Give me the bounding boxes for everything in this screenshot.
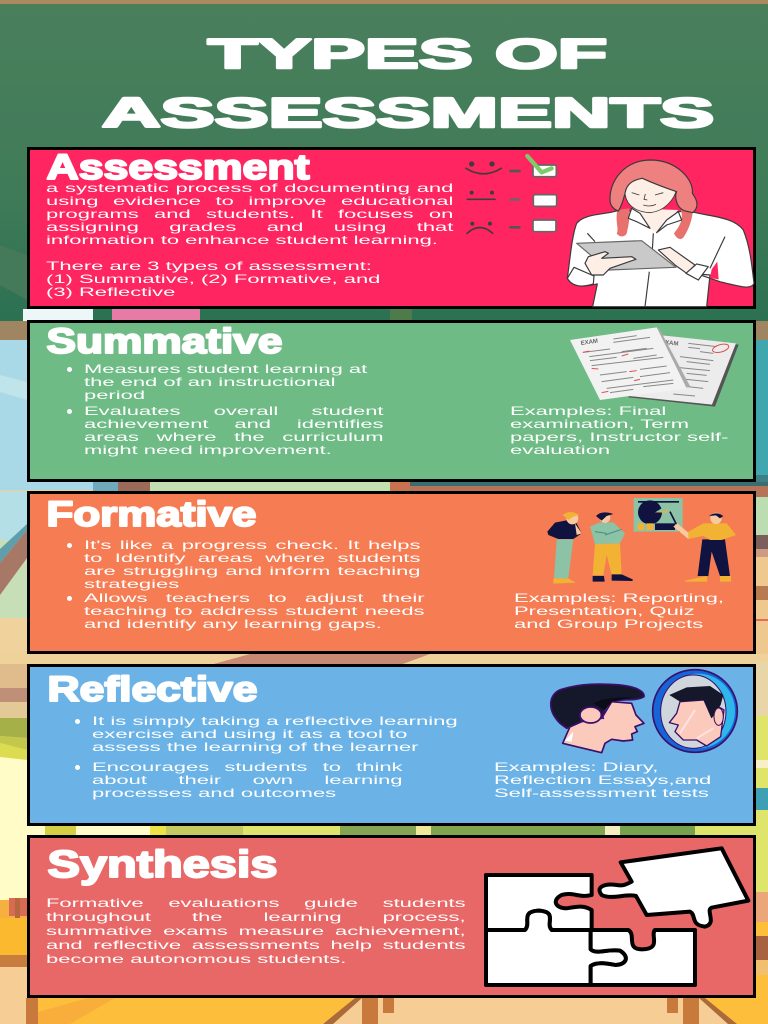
icon: woman with tablet: [566, 159, 754, 308]
text: definition of assessment: There are 3 types of assessment:: [46, 258, 371, 272]
gap between formative and reflective: [0, 654, 768, 665]
icon: people at a presentation: [547, 498, 736, 584]
bullet list: reflective: [75, 714, 458, 800]
text: summative examples: Examples: Final: [510, 404, 666, 418]
text: definition of assessment: information to enhance student learning.: [46, 232, 437, 246]
panel: assessment: [27, 147, 756, 309]
heading: synthesis: Synthesis: [48, 844, 278, 886]
bullet list: reflective: assess the learning of the learner: [92, 740, 419, 754]
title: [102, 30, 714, 136]
bullet list: summative: Evaluates overall student: [84, 404, 384, 418]
bullet list: formative: to Identify areas where students: [84, 550, 421, 564]
text: reflective examples: [494, 760, 711, 800]
bullet list: formative: strategies: [84, 576, 179, 590]
text: synthesis summary: summative exams measure achievement,: [46, 924, 465, 938]
text: synthesis summary: and reflective assessments help students: [46, 938, 465, 952]
bullet list: reflective: about their own learning: [92, 772, 403, 786]
gap between reflective and synthesis: [0, 826, 768, 836]
text: formative examples: [514, 590, 724, 630]
bullet list: reflective: processes and outcomes: [92, 786, 336, 800]
person 3: [698, 539, 730, 576]
heading: summative: Summative: [46, 322, 282, 361]
icon: exam papers: EXAM: [580, 339, 598, 347]
bullet list: reflective: Encourages students to think: [92, 760, 403, 774]
text: definition of assessment: using evidence to improve educational: [46, 194, 453, 208]
person 1: [554, 539, 573, 578]
bullet list: summative: period: [84, 388, 145, 402]
text: summative examples: examination, Term: [510, 416, 689, 430]
text: formative examples: and Group Projects: [514, 616, 703, 630]
text: formative examples: Presentation, Quiz: [514, 604, 694, 618]
text: summative examples: [510, 404, 728, 456]
panel: summative: [27, 320, 756, 482]
title: TYPES OF: [208, 30, 607, 77]
bullet list: summative: Measures student learning at: [84, 362, 367, 376]
person 2: [593, 543, 622, 575]
bullet list: formative: [67, 538, 425, 630]
panel: synthesis: [27, 835, 756, 998]
bullet list: summative: might need improvement.: [84, 442, 332, 456]
bullet list: reflective: exercise and using it as a tool to: [92, 726, 407, 740]
bullet list: reflective: It is simply taking a reflective learning: [92, 714, 458, 728]
text: definition of assessment: (3) Reflective: [46, 284, 175, 298]
text: summative examples: evaluation: [510, 442, 610, 456]
bullet list: formative: teaching to address student needs: [84, 604, 425, 618]
bullet list: summative: the end of an instructional: [84, 374, 336, 388]
bullet list: formative: Allows teachers to adjust their: [84, 590, 425, 604]
icon: smiley rating checklist: [465, 154, 558, 234]
text: formative examples: Examples: Reporting,: [514, 590, 724, 604]
text: definition of assessment: [46, 180, 454, 298]
heading: reflective: Reflective: [48, 670, 258, 709]
text: reflective examples: Examples: Diary,: [494, 760, 658, 774]
text: definition of assessment: programs and students. It focuses on: [46, 206, 453, 220]
icon: exam papers: [570, 327, 739, 407]
text: synthesis summary: Formative evaluations guide students: [46, 896, 465, 910]
bullet list: formative: and identify any learning gaps.: [84, 616, 382, 630]
heading: formative: Formative: [46, 495, 256, 534]
text: definition of assessment: (1) Summative, (2) Formative, and: [46, 272, 380, 286]
title: ASSESSMENTS: [102, 89, 714, 136]
icon: head and mirror: [550, 668, 738, 754]
bullet list: formative: It's like a progress check. It helps: [84, 538, 421, 552]
panel: reflective: [27, 664, 756, 826]
bullet list: summative: achievement and identifies: [84, 416, 384, 430]
text: synthesis summary: throughout the learning process,: [46, 910, 465, 924]
gap between summative and formative: [93, 482, 118, 491]
text: synthesis summary: become autonomous students.: [46, 952, 346, 966]
text: reflective examples: Self-assessment tests: [494, 786, 709, 800]
icon: exam papers: XAM: [665, 340, 679, 348]
heading: assessment: Assessment: [46, 148, 310, 187]
text: definition of assessment: assigning grades and using that: [46, 220, 453, 234]
bullet list: formative: are struggling and inform teaching: [84, 564, 421, 578]
text: reflective examples: Reflection Essays,and: [494, 772, 711, 786]
text: definition of assessment: a systematic process of documenting and: [46, 180, 453, 194]
bullet list: summative: [67, 362, 384, 456]
text: synthesis summary: [46, 896, 465, 966]
bullet list: summative: areas where the curriculum: [84, 430, 384, 444]
text: summative examples: papers, Instructor self-: [510, 430, 728, 444]
icon: puzzle pieces: [484, 846, 750, 987]
panel: formative: [27, 491, 756, 654]
